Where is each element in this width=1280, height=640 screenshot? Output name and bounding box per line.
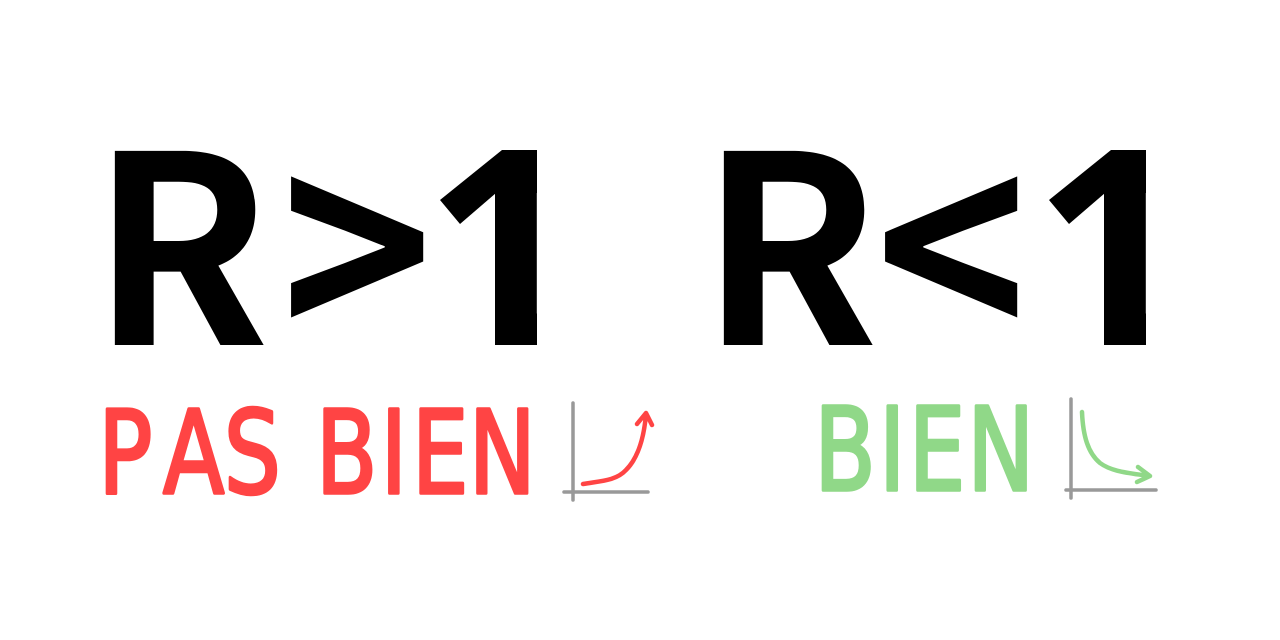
heading: R less than 1 xyxy=(724,150,1146,345)
label: BIEN: BIEN xyxy=(814,384,1034,518)
heading: R greater than 1: 1 xyxy=(425,42,595,421)
heading: R greater than 1: R xyxy=(91,42,270,421)
chart icon: rising curve xyxy=(564,403,652,500)
chart icon: falling curve xyxy=(1066,399,1156,498)
heading: R less than 1: R xyxy=(700,42,879,421)
label: PAS BIEN: PAS BIEN xyxy=(98,387,536,521)
heading: R less than 1: 1 xyxy=(1034,42,1204,421)
heading: R greater than 1 xyxy=(114,150,537,345)
heading: R greater than 1: > xyxy=(281,27,433,434)
heading: R less than 1: < xyxy=(875,27,1027,434)
